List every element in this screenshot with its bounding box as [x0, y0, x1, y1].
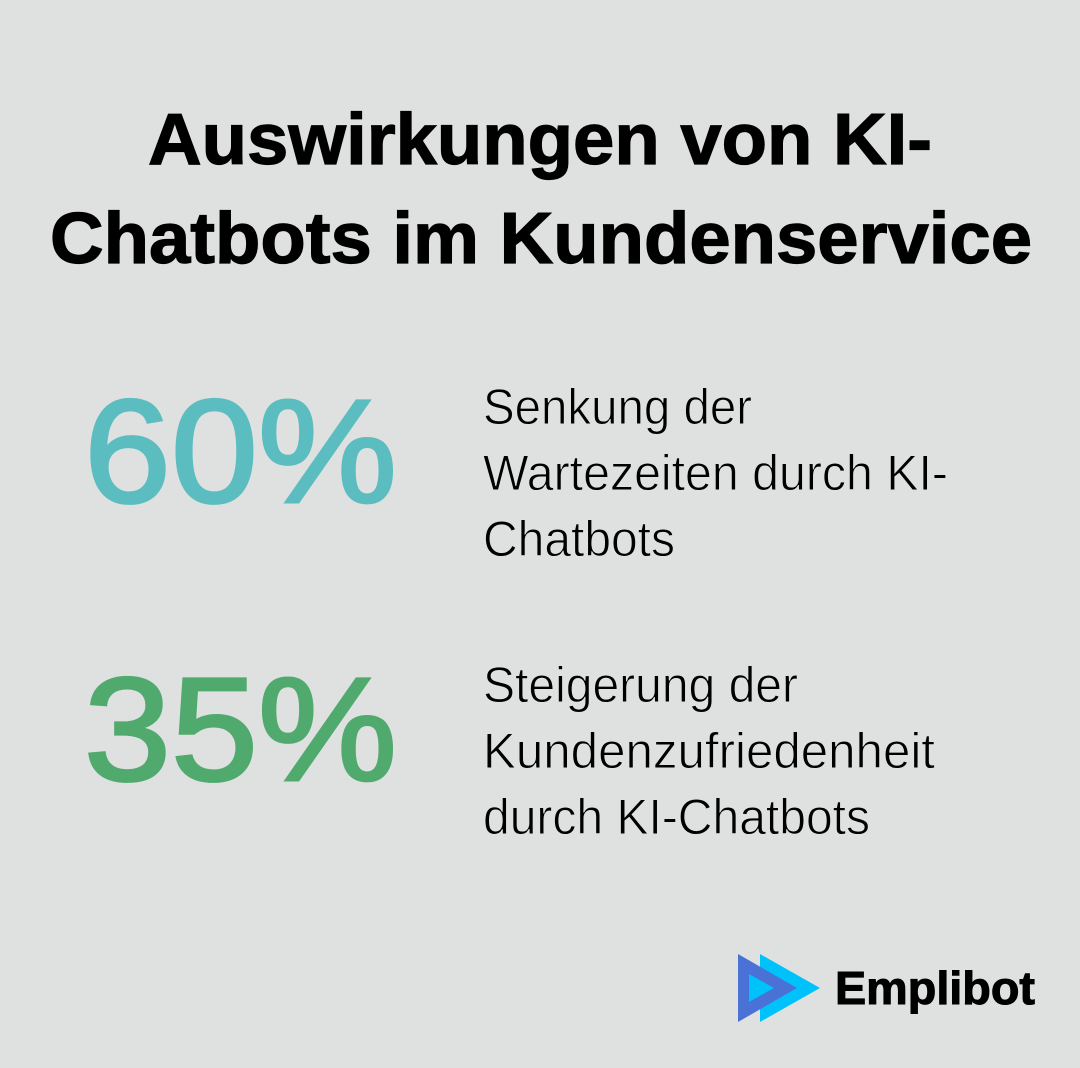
stat: 60%: 60%	[84, 370, 397, 534]
logo wordmark: Emplibot	[835, 962, 1035, 1014]
description: Steigerung der Kundenzufriedenheit: Steigerung der	[483, 657, 798, 713]
description: Steigerung der Kundenzufriedenheit: durch KI-Chatbots	[483, 789, 870, 845]
stat: 35%: 35%	[84, 648, 397, 812]
description: Senkung der Wartezeiten: Chatbots	[483, 511, 675, 567]
icon: play triangles	[738, 954, 820, 1022]
description: Senkung der Wartezeiten	[483, 379, 948, 567]
description: Senkung der Wartezeiten: Senkung der	[483, 379, 752, 435]
logo: Emplibot	[738, 954, 1035, 1022]
description: Steigerung der Kundenzufriedenheit	[483, 657, 935, 845]
description: Steigerung der Kundenzufriedenheit: Kundenzufriedenheit	[483, 723, 935, 779]
title: Auswirkungen von KI-	[148, 100, 932, 180]
title	[50, 100, 1032, 279]
description: Senkung der Wartezeiten: Wartezeiten durch KI-	[483, 445, 948, 501]
title: Chatbots im Kundenservice	[50, 199, 1032, 279]
